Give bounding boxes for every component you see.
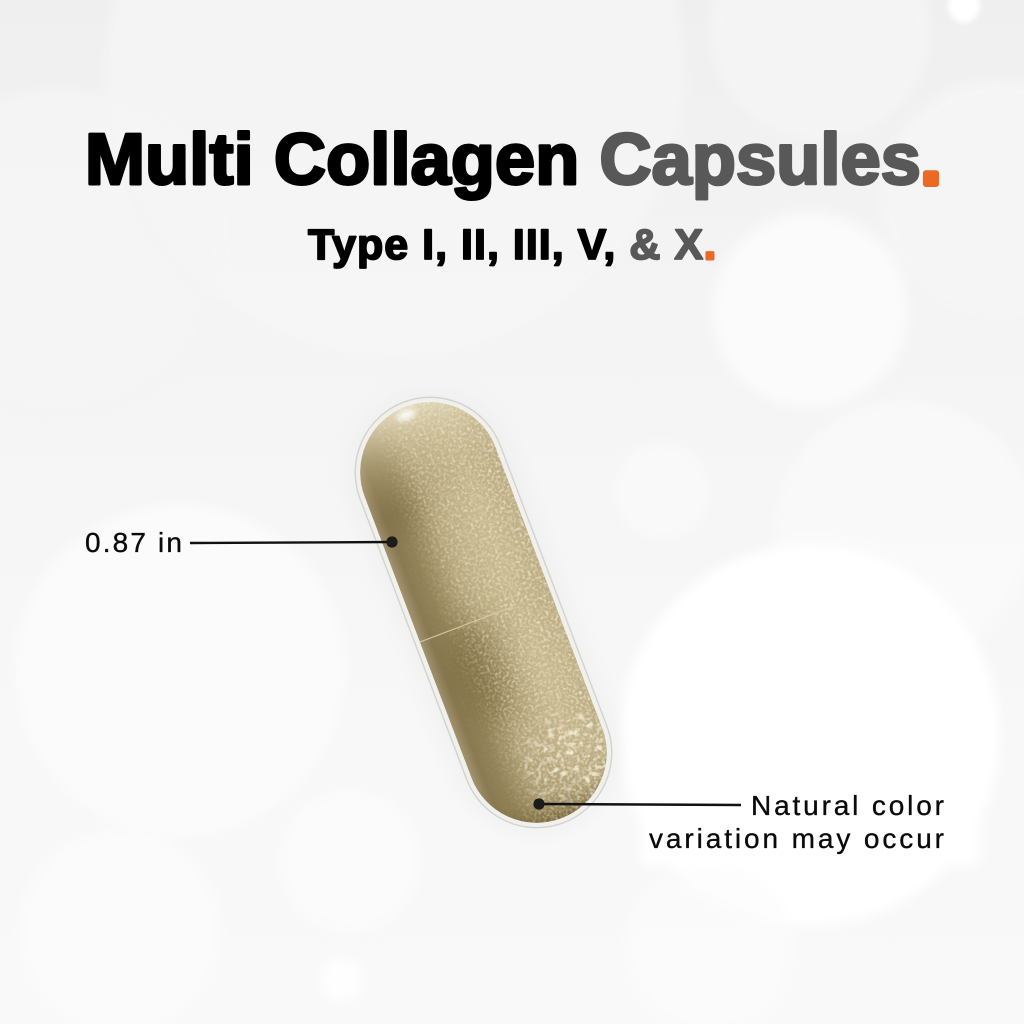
length marker dot	[386, 536, 398, 548]
color variation leader line	[539, 804, 741, 805]
length leader line	[190, 542, 392, 543]
capsule shadow	[330, 374, 637, 851]
length label: 0.87 in	[85, 527, 182, 558]
callout: color variation	[533, 790, 944, 854]
subtitle: Type I, II, III, V, & X.	[308, 221, 716, 269]
capsule powder fill	[360, 402, 607, 823]
title: Multi Collagen Capsules.	[85, 120, 941, 200]
color variation label: variation may occur	[649, 823, 944, 854]
capsule	[354, 396, 612, 828]
capsule highlight	[395, 407, 417, 423]
capsule seam	[420, 607, 511, 642]
color variation marker dot	[533, 798, 545, 810]
bright bokeh spot	[948, 0, 980, 23]
callout: length	[85, 527, 398, 558]
capsule shell	[333, 376, 634, 849]
color variation label: Natural color	[751, 790, 944, 821]
shading blotches	[445, 614, 522, 729]
